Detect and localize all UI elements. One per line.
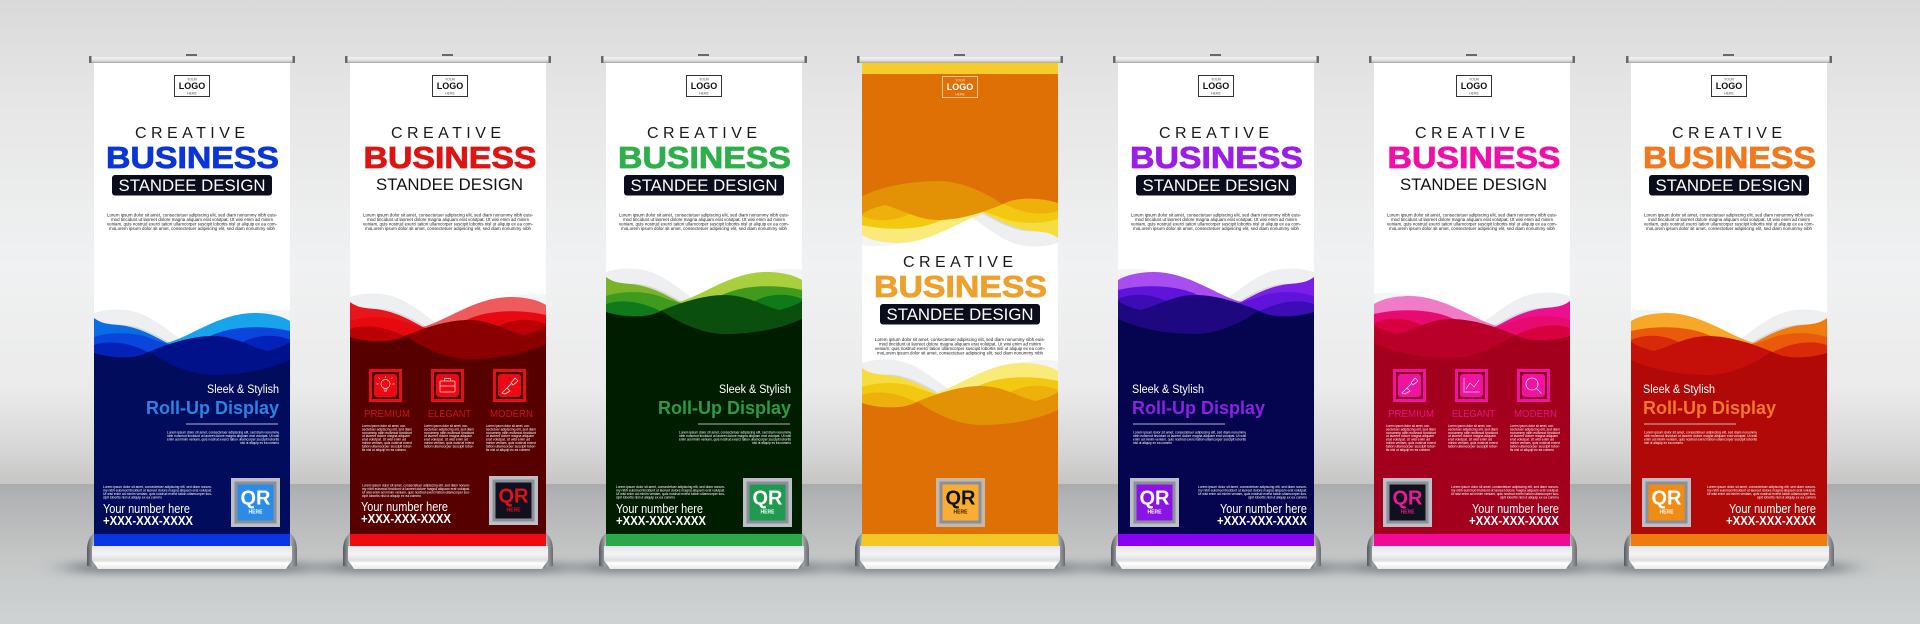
column text 2: erat volutpat. Ut wisi enim ad bbox=[1448, 438, 1492, 442]
logo: YOUR bbox=[699, 78, 710, 82]
small text: nisl ut aliquip ex ea commo bbox=[1133, 441, 1172, 445]
intro text bbox=[619, 212, 789, 231]
icon: chain link bbox=[1394, 370, 1424, 400]
small text bbox=[679, 430, 791, 445]
contact text: Your number here bbox=[616, 502, 703, 516]
heading: creative: CREATIVE bbox=[1415, 125, 1525, 142]
column text 3: Lorem ipsum dolor sit amet, con- bbox=[486, 424, 530, 428]
contact text: +XXX-XXX-XXXX bbox=[1469, 514, 1560, 528]
intro text: mod tincidunt ut laoreet dolore magna aliquam erat volutpat. Ut wisi enim ad minim bbox=[1648, 217, 1810, 222]
contact text: cipit lobortis nisl ut aliquip ex ea commo bbox=[1248, 496, 1307, 500]
column text 2: tation ullamcorper suscipit lobor- bbox=[424, 444, 474, 448]
label: modern: MODERN bbox=[1514, 409, 1557, 420]
QR placeholder bbox=[1130, 478, 1179, 527]
contact text: my nibh euismod tincidunt ut laoreet dolore magna aliquam erat volutpat. bbox=[103, 488, 212, 492]
body panel bbox=[1631, 385, 1827, 535]
intro text: mod tincidunt ut laoreet dolore magna aliquam erat volutpat. Ut wisi enim ad minim bbox=[623, 217, 785, 222]
contact text: my nibh euismod tincidunt ut laoreet dolore magna aliquam erat volutpat. bbox=[362, 487, 470, 491]
QR placeholder: QR bbox=[946, 488, 976, 510]
column text 2: sectetuer adipiscing elit, sed diam bbox=[424, 427, 474, 431]
column text 2 bbox=[1448, 424, 1498, 448]
divider bbox=[1133, 424, 1225, 425]
contact text: Lorem ipsum dolor sit amet, consectetuer adipiscing elit, sed diam nonum- bbox=[1451, 485, 1559, 489]
column text 1: sectetuer adipiscing elit, sed diam bbox=[1386, 427, 1436, 431]
contact text: +XXX-XXX-XXXX bbox=[616, 514, 707, 528]
QR placeholder: HERE bbox=[1401, 510, 1415, 516]
contact text: +XXX-XXX-XXXX bbox=[361, 512, 452, 526]
column text 2: ut laoreet dolore magna aliquam bbox=[1448, 434, 1496, 438]
intro text: Lorem ipsum dolor sit amet, consectetuer adipiscing elit, sed diam nonummy nibh euis- bbox=[875, 337, 1045, 342]
roll-up title: Roll-Up Display bbox=[146, 398, 279, 418]
QR placeholder: HERE bbox=[1660, 510, 1674, 516]
contact text bbox=[1198, 485, 1308, 528]
contact text: Your number here bbox=[1220, 502, 1307, 516]
heading: creative: CREATIVE bbox=[135, 125, 245, 142]
column text 1 bbox=[1386, 424, 1436, 452]
intro text: veniam, quis nostrud exerci tation ullamcorper suscipit lobortis nisl ut aliquip ex ea com- bbox=[1387, 222, 1557, 226]
logo: HERE bbox=[699, 92, 710, 96]
intro text: veniam, quis nostrud exerci tation ullamcorper suscipit lobortis nisl ut aliquip ex ea com- bbox=[875, 346, 1045, 351]
divider bbox=[186, 424, 278, 425]
intro text: veniam, quis nostrud exerci tation ullamcorper suscipit lobortis nisl ut aliquip ex ea com- bbox=[107, 222, 277, 226]
column text 2: sectetuer adipiscing elit, sed diam bbox=[1448, 427, 1498, 431]
QR placeholder bbox=[743, 478, 792, 527]
subheading: standee design: STANDEE DESIGN bbox=[1400, 176, 1547, 194]
label: premium: PREMIUM bbox=[364, 409, 410, 420]
body panel bbox=[94, 385, 290, 535]
QR placeholder: HERE bbox=[761, 510, 775, 516]
QR placeholder bbox=[1642, 478, 1691, 527]
column text 2 bbox=[424, 424, 474, 448]
logo bbox=[432, 76, 468, 96]
logo: LOGO bbox=[1203, 81, 1229, 91]
contact text: Lorem ipsum dolor sit amet, consectetuer adipiscing elit, sed diam nonum- bbox=[362, 484, 470, 488]
logo: HERE bbox=[1469, 92, 1480, 96]
label: elegant: ELEGANT bbox=[1452, 409, 1495, 420]
icon: magnifier bbox=[1518, 370, 1548, 400]
top waves bbox=[862, 156, 1058, 247]
divider bbox=[1644, 424, 1736, 425]
small text: Lorem ipsum dolor sit amet, consectetuer adipiscing elit, sed diam nonummy bbox=[679, 430, 791, 434]
intro text: mod tincidunt ut laoreet dolore magna aliquam erat volutpat. Ut wisi enim ad minim bbox=[1135, 217, 1297, 222]
column text 3: minim veniam, quis nostrud exerci bbox=[486, 441, 536, 445]
heading: business: BUSINESS bbox=[1130, 140, 1303, 175]
column text 1: Lorem ipsum dolor sit amet, con- bbox=[1386, 424, 1430, 428]
logo: LOGO bbox=[1461, 81, 1487, 91]
contact text bbox=[361, 484, 470, 526]
column text 2: nonummy nibh euismod tincidunt bbox=[424, 431, 474, 435]
column text 3: ut laoreet dolore magna aliquam bbox=[1510, 434, 1558, 438]
contact text: +XXX-XXX-XXXX bbox=[1217, 514, 1308, 528]
standee 1: blue bbox=[87, 54, 297, 569]
column text 2: erat volutpat. Ut wisi enim ad bbox=[424, 438, 468, 442]
waves bbox=[1631, 309, 1827, 400]
small text: nisl ut aliquip ex ea commo bbox=[1644, 441, 1683, 445]
roll-up title: Roll-Up Display bbox=[658, 398, 791, 418]
standee 7: orange-red bbox=[1624, 54, 1834, 569]
intro text: moLorem ipsum dolor sit amet, consectetuer adipiscing elit, sed diam nonummy nibh bbox=[109, 226, 275, 231]
column text 2: nonummy nibh euismod tincidunt bbox=[1448, 431, 1498, 435]
column text 2: Lorem ipsum dolor sit amet, con- bbox=[424, 424, 468, 428]
small text: nibh euismod tincidunt ut laoreet dolore magna aliquam erat volutpat. Ut wisi bbox=[1644, 434, 1757, 438]
heading: business: BUSINESS bbox=[618, 140, 791, 175]
column text 1: minim veniam, quis nostrud exerci bbox=[362, 441, 412, 445]
logo bbox=[1712, 76, 1746, 96]
column text 2: minim veniam, quis nostrud exerci bbox=[424, 441, 474, 445]
sub-heading: Sleek & Stylish bbox=[207, 384, 279, 396]
contact text: my nibh euismod tincidunt ut laoreet dolore magna aliquam erat volutpat. bbox=[616, 488, 725, 492]
logo: LOGO bbox=[1716, 81, 1742, 91]
contact text: my nibh euismod tincidunt ut laoreet dolore magna aliquam erat volutpat. bbox=[1707, 488, 1816, 492]
roll-up title: Roll-Up Display bbox=[1643, 398, 1776, 418]
small text: nibh euismod tincidunt ut laoreet dolore magna aliquam erat volutpat. Ut wisi bbox=[1133, 434, 1246, 438]
intro text: moLorem ipsum dolor sit amet, consectetuer adipiscing elit, sed diam nonummy nibh bbox=[621, 226, 787, 231]
icon: chart bbox=[1456, 370, 1486, 400]
heading: creative: CREATIVE bbox=[391, 125, 501, 142]
small text: nisl ut aliquip ex ea commo bbox=[752, 441, 791, 445]
intro text: veniam, quis nostrud exerci tation ullamcorper suscipit lobortis nisl ut aliquip ex ea com- bbox=[1644, 222, 1814, 226]
logo bbox=[942, 76, 978, 98]
pill: standee design: STANDEE DESIGN bbox=[886, 306, 1034, 324]
column text 1: tis nisl ut aliquip ex ea commo bbox=[1386, 448, 1430, 452]
small text: nibh euismod tincidunt ut laoreet dolore magna aliquam erat volutpat. Ut wisi bbox=[679, 434, 791, 438]
pill: standee design: STANDEE DESIGN bbox=[1656, 177, 1802, 195]
column text 3: nonummy nibh euismod tincidunt bbox=[1510, 431, 1560, 435]
contact text: Ut wisi enim ad minim veniam, quis nostrud exerci tation ullamcorper sus- bbox=[616, 492, 725, 496]
heading: business: BUSINESS bbox=[364, 140, 536, 175]
intro text: Lorem ipsum dolor sit amet, consectetuer adipiscing elit, sed diam nonummy nibh euis- bbox=[619, 212, 789, 218]
body panel bbox=[1374, 368, 1570, 535]
bottom stripe bbox=[94, 534, 290, 546]
label: elegant: ELEGANT bbox=[428, 409, 471, 420]
QR placeholder: QR bbox=[240, 488, 271, 510]
column text 2: tation ullamcorper suscipit lobor- bbox=[1448, 444, 1498, 448]
contact text: cipit lobortis nisl ut aliquip ex ea commo bbox=[616, 496, 675, 500]
standee 4: orange centre bbox=[855, 54, 1065, 569]
column text 1: minim veniam, quis nostrud exerci bbox=[1386, 441, 1436, 445]
column text 1: ut laoreet dolore magna aliquam bbox=[1386, 434, 1434, 438]
contact text: Ut wisi enim ad minim veniam, quis nostrud exerci tation ullamcorper sus- bbox=[1451, 492, 1559, 496]
contact text: Ut wisi enim ad minim veniam, quis nostrud exerci tation ullamcorper sus- bbox=[103, 492, 212, 496]
intro text bbox=[363, 212, 533, 231]
bottom stripe bbox=[1631, 534, 1827, 546]
QR placeholder: QR bbox=[1140, 488, 1170, 510]
QR placeholder: HERE bbox=[954, 510, 968, 516]
bottom stripe bbox=[1374, 534, 1570, 546]
bottom stripe bbox=[606, 534, 802, 546]
intro text: moLorem ipsum dolor sit amet, consectetuer adipiscing elit, sed diam nonummy nibh bbox=[1133, 226, 1299, 231]
intro text bbox=[1131, 212, 1301, 231]
intro text: veniam, quis nostrud exerci tation ullamcorper suscipit lobortis nisl ut aliquip ex ea com- bbox=[619, 222, 789, 226]
logo: YOUR bbox=[955, 78, 966, 82]
small text: enim ad minim veniam, quis nostrud exerci tation ullamcorper suscipit lobortis bbox=[167, 438, 279, 442]
column text 1: tis nisl ut aliquip ex ea commo bbox=[362, 448, 406, 452]
column text 3: tis nisl ut aliquip ex ea commo bbox=[1510, 448, 1554, 452]
column text 3: erat volutpat. Ut wisi enim ad bbox=[486, 438, 530, 442]
icon: chain link bbox=[494, 370, 524, 400]
column text 3: tis nisl ut aliquip ex ea commo bbox=[486, 448, 530, 452]
bottom stripe bbox=[862, 534, 1058, 546]
column text 1: nonummy nibh euismod tincidunt bbox=[1386, 431, 1436, 435]
contact text: Your number here bbox=[1472, 502, 1559, 516]
contact text: Lorem ipsum dolor sit amet, consectetuer adipiscing elit, sed diam nonum- bbox=[103, 485, 212, 489]
logo: LOGO bbox=[179, 81, 205, 91]
QR placeholder bbox=[489, 476, 538, 525]
contact text: Your number here bbox=[1729, 502, 1816, 516]
intro text: mod tincidunt ut laoreet dolore magna aliquam erat volutpat. Ut wisi enim ad minim bbox=[367, 217, 529, 222]
pill: standee design: STANDEE DESIGN bbox=[630, 177, 778, 195]
logo bbox=[686, 76, 722, 96]
contact text: Ut wisi enim ad minim veniam, quis nostrud exerci tation ullamcorper sus- bbox=[362, 490, 470, 494]
column text 3: ut laoreet dolore magna aliquam bbox=[486, 434, 534, 438]
pill: standee design: STANDEE DESIGN bbox=[118, 177, 266, 195]
sub-heading: Sleek & Stylish bbox=[1643, 384, 1715, 396]
column text 3: sectetuer adipiscing elit, sed diam bbox=[486, 427, 536, 431]
QR placeholder: HERE bbox=[249, 510, 263, 516]
logo: YOUR bbox=[1211, 78, 1222, 82]
contact text: Lorem ipsum dolor sit amet, consectetuer adipiscing elit, sed diam nonum- bbox=[1198, 485, 1307, 489]
waves bbox=[606, 268, 802, 359]
column text 1: erat volutpat. Ut wisi enim ad bbox=[362, 438, 406, 442]
heading: creative: CREATIVE bbox=[903, 254, 1013, 271]
waves bbox=[350, 293, 546, 384]
waves bbox=[94, 309, 290, 400]
intro text: Lorem ipsum dolor sit amet, consectetuer adipiscing elit, sed diam nonummy nibh euis- bbox=[1387, 212, 1557, 218]
heading: business: BUSINESS bbox=[874, 269, 1047, 304]
contact text: cipit lobortis nisl ut aliquip ex ea commo bbox=[362, 494, 421, 498]
small text: Lorem ipsum dolor sit amet, consectetuer adipiscing elit, sed diam nonummy bbox=[167, 430, 279, 434]
contact text bbox=[1451, 485, 1560, 528]
intro text bbox=[875, 337, 1045, 356]
QR placeholder: HERE bbox=[1148, 510, 1162, 516]
roll-up title: Roll-Up Display bbox=[1132, 398, 1265, 418]
body panel bbox=[862, 435, 1058, 535]
column text 1: nonummy nibh euismod tincidunt bbox=[362, 431, 412, 435]
floor shadows under stands bbox=[70, 562, 1846, 573]
contact text: cipit lobortis nisl ut aliquip ex ea commo bbox=[1757, 496, 1816, 500]
logo bbox=[174, 76, 210, 96]
intro text bbox=[1644, 212, 1814, 231]
column text 2: Lorem ipsum dolor sit amet, con- bbox=[1448, 424, 1492, 428]
body panel bbox=[350, 369, 546, 535]
logo: HERE bbox=[1724, 92, 1735, 96]
body panel bbox=[606, 344, 802, 535]
logo: YOUR bbox=[1469, 78, 1480, 82]
small text: enim ad minim veniam, quis nostrud exerci tation ullamcorper suscipit lobortis bbox=[1644, 438, 1757, 442]
intro text: moLorem ipsum dolor sit amet, consectetuer adipiscing elit, sed diam nonummy nibh bbox=[1646, 226, 1812, 231]
intro text: veniam, quis nostrud exerci tation ullamcorper suscipit lobortis nisl ut aliquip ex ea com- bbox=[363, 222, 533, 226]
column text 2: ut laoreet dolore magna aliquam bbox=[424, 434, 472, 438]
column text 1: ut laoreet dolore magna aliquam bbox=[362, 434, 410, 438]
column text 1: tation ullamcorper suscipit lobor- bbox=[362, 444, 412, 448]
QR placeholder bbox=[231, 478, 280, 527]
standee 6: pink bbox=[1367, 54, 1577, 569]
standee 5: purple bbox=[1111, 54, 1321, 569]
column text 1: Lorem ipsum dolor sit amet, con- bbox=[362, 424, 406, 428]
logo: YOUR bbox=[1724, 78, 1735, 82]
contact text: Lorem ipsum dolor sit amet, consectetuer adipiscing elit, sed diam nonum- bbox=[616, 485, 725, 489]
small text: Lorem ipsum dolor sit amet, consectetuer adipiscing elit, sed diam nonummy bbox=[1133, 430, 1246, 434]
logo: HERE bbox=[445, 92, 456, 96]
contact text: Ut wisi enim ad minim veniam, quis nostrud exerci tation ullamcorper sus- bbox=[1198, 492, 1307, 496]
intro text bbox=[107, 212, 277, 231]
QR placeholder: QR bbox=[1652, 488, 1682, 510]
contact text: cipit lobortis nisl ut aliquip ex ea commo bbox=[1500, 496, 1559, 500]
contact text: Lorem ipsum dolor sit amet, consectetuer adipiscing elit, sed diam nonum- bbox=[1707, 485, 1816, 489]
waves bbox=[1118, 268, 1314, 359]
subheading: standee design: STANDEE DESIGN bbox=[376, 176, 523, 194]
intro text: Lorem ipsum dolor sit amet, consectetuer adipiscing elit, sed diam nonummy nibh euis- bbox=[107, 212, 277, 218]
contact text: +XXX-XXX-XXXX bbox=[103, 514, 194, 528]
logo: LOGO bbox=[437, 81, 463, 91]
sub-heading: Sleek & Stylish bbox=[719, 384, 791, 396]
intro text: mod tincidunt ut laoreet dolore magna aliquam erat volutpat. Ut wisi enim ad minim bbox=[879, 342, 1041, 346]
contact text: my nibh euismod tincidunt ut laoreet dolore magna aliquam erat volutpat. bbox=[1198, 488, 1307, 492]
column text 3 bbox=[486, 424, 536, 452]
column text 2: minim veniam, quis nostrud exerci bbox=[1448, 441, 1498, 445]
standee 3: green bbox=[599, 54, 809, 569]
column text 3: sectetuer adipiscing elit, sed diam bbox=[1510, 427, 1560, 431]
intro text: Lorem ipsum dolor sit amet, consectetuer adipiscing elit, sed diam nonummy nibh euis- bbox=[363, 212, 533, 218]
column text 1: sectetuer adipiscing elit, sed diam bbox=[362, 427, 412, 431]
heading: creative: CREATIVE bbox=[1159, 125, 1269, 142]
background: wall bbox=[0, 0, 1920, 485]
small text: nibh euismod tincidunt ut laoreet dolore magna aliquam erat volutpat. Ut wisi bbox=[167, 434, 279, 438]
small text bbox=[1133, 430, 1246, 445]
logo: YOUR bbox=[445, 78, 456, 82]
intro text: Lorem ipsum dolor sit amet, consectetuer adipiscing elit, sed diam nonummy nibh euis- bbox=[1644, 212, 1814, 218]
intro text: moLorem ipsum dolor sit amet, consectetuer adipiscing elit, sed diam nonummy nibh bbox=[1389, 226, 1555, 231]
intro text: mod tincidunt ut laoreet dolore magna aliquam erat volutpat. Ut wisi enim ad minim bbox=[1391, 217, 1553, 222]
intro text: moLorem ipsum dolor sit amet, consectetuer adipiscing elit, sed diam nonummy nibh bbox=[877, 350, 1043, 356]
body panel bbox=[1118, 344, 1314, 535]
heading: creative: CREATIVE bbox=[647, 125, 757, 142]
waves bbox=[1374, 292, 1570, 383]
intro text: mod tincidunt ut laoreet dolore magna aliquam erat volutpat. Ut wisi enim ad minim bbox=[111, 217, 273, 222]
contact text: Ut wisi enim ad minim veniam, quis nostrud exerci tation ullamcorper sus- bbox=[1707, 492, 1816, 496]
column text 3: Lorem ipsum dolor sit amet, con- bbox=[1510, 424, 1554, 428]
QR placeholder: QR bbox=[1392, 488, 1423, 510]
logo bbox=[1456, 76, 1492, 96]
label: modern: MODERN bbox=[490, 409, 533, 420]
logo: LOGO bbox=[691, 81, 717, 91]
small text: nisl ut aliquip ex ea commo bbox=[240, 441, 279, 445]
small text bbox=[1644, 430, 1757, 445]
contact text: Your number here bbox=[103, 502, 190, 516]
logo: HERE bbox=[187, 92, 198, 96]
logo bbox=[1198, 76, 1234, 96]
divider bbox=[698, 424, 790, 425]
label: premium: PREMIUM bbox=[1388, 409, 1434, 420]
heading: business: BUSINESS bbox=[106, 140, 279, 175]
icon: briefcase bbox=[432, 370, 462, 400]
QR placeholder bbox=[936, 478, 985, 527]
column text 3: tation ullamcorper suscipit lobor- bbox=[486, 444, 536, 448]
contact text: Your number here bbox=[361, 500, 448, 514]
intro text: Lorem ipsum dolor sit amet, consectetuer adipiscing elit, sed diam nonummy nibh euis- bbox=[1131, 212, 1301, 218]
bottom stripe bbox=[1118, 534, 1314, 546]
column text 3: tation ullamcorper suscipit lobor- bbox=[1510, 444, 1560, 448]
top colour block bbox=[862, 73, 1058, 173]
standee 2: red bbox=[343, 54, 553, 569]
contact text bbox=[1707, 485, 1817, 528]
small text bbox=[167, 430, 279, 445]
column text 1 bbox=[362, 424, 412, 452]
small text: enim ad minim veniam, quis nostrud exerci tation ullamcorper suscipit lobortis bbox=[679, 438, 791, 442]
column text 3 bbox=[1510, 424, 1560, 452]
heading: creative: CREATIVE bbox=[1672, 125, 1782, 142]
small text: Lorem ipsum dolor sit amet, consectetuer adipiscing elit, sed diam nonummy bbox=[1644, 430, 1757, 434]
contact text: +XXX-XXX-XXXX bbox=[1726, 514, 1817, 528]
heading: business: BUSINESS bbox=[1643, 140, 1816, 175]
logo: HERE bbox=[1211, 92, 1222, 96]
intro text: moLorem ipsum dolor sit amet, consectetuer adipiscing elit, sed diam nonummy nibh bbox=[365, 226, 531, 231]
intro text: veniam, quis nostrud exerci tation ullamcorper suscipit lobortis nisl ut aliquip ex ea com- bbox=[1131, 222, 1301, 226]
bottom waves bbox=[862, 359, 1058, 450]
QR placeholder: HERE bbox=[507, 508, 521, 514]
icon: light bulb bbox=[370, 370, 400, 400]
column text 3: erat volutpat. Ut wisi enim ad bbox=[1510, 438, 1554, 442]
column text 1: erat volutpat. Ut wisi enim ad bbox=[1386, 438, 1430, 442]
pill: standee design: STANDEE DESIGN bbox=[1142, 177, 1290, 195]
contact text bbox=[616, 485, 725, 528]
top yellow stripe bbox=[862, 63, 1058, 74]
heading: business: BUSINESS bbox=[1388, 140, 1560, 175]
logo: LOGO bbox=[947, 82, 973, 92]
QR placeholder: QR bbox=[498, 486, 529, 508]
small text: enim ad minim veniam, quis nostrud exerci tation ullamcorper suscipit lobortis bbox=[1133, 438, 1246, 442]
contact text bbox=[103, 485, 212, 528]
contact text: cipit lobortis nisl ut aliquip ex ea commo bbox=[103, 496, 162, 500]
logo: YOUR bbox=[187, 78, 198, 82]
QR placeholder: QR bbox=[752, 488, 783, 510]
bottom stripe bbox=[350, 534, 546, 546]
sub-heading: Sleek & Stylish bbox=[1132, 384, 1204, 396]
column text 3: nonummy nibh euismod tincidunt bbox=[486, 431, 536, 435]
QR placeholder bbox=[1383, 478, 1432, 527]
intro text bbox=[1387, 212, 1557, 231]
column text 1: tation ullamcorper suscipit lobor- bbox=[1386, 444, 1436, 448]
contact text: my nibh euismod tincidunt ut laoreet dolore magna aliquam erat volutpat. bbox=[1451, 488, 1559, 492]
column text 3: minim veniam, quis nostrud exerci bbox=[1510, 441, 1560, 445]
background: floor bbox=[0, 484, 1920, 624]
logo: HERE bbox=[955, 92, 966, 96]
